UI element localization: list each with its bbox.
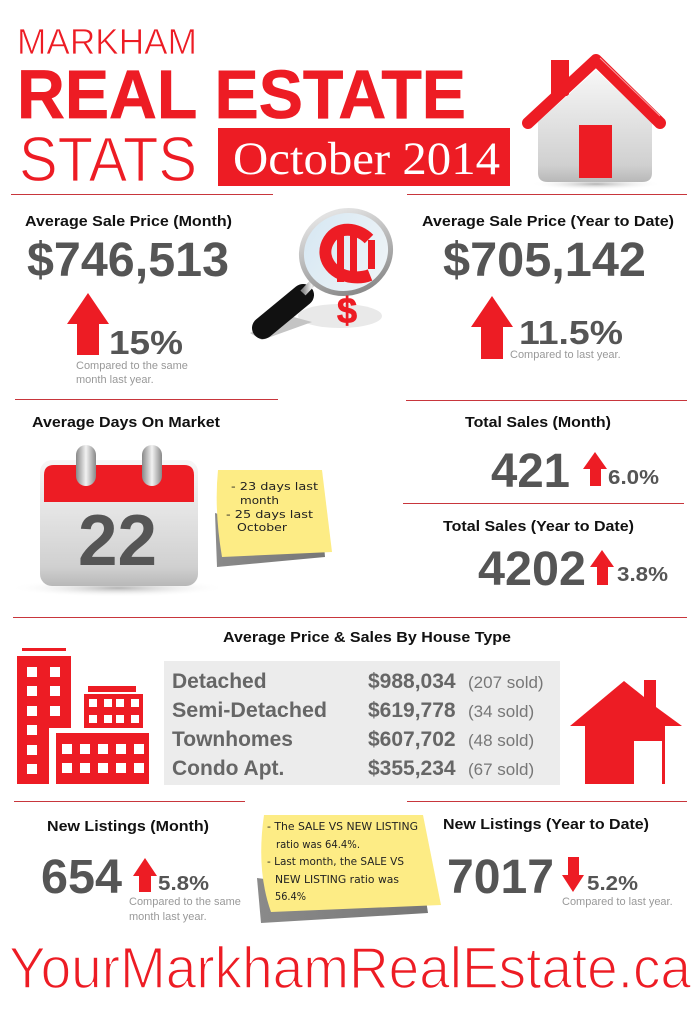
stat: new listings year to date: Compared to last year. xyxy=(562,896,673,908)
stat: average sale price month: $746,513 xyxy=(27,234,229,287)
row: detached xyxy=(172,670,544,693)
title: REAL ESTATE xyxy=(17,56,466,133)
stat: total sales month: 6.0% xyxy=(608,467,659,489)
stat: average sale price month: Compared to the same xyxy=(76,360,188,372)
sticky note: days on market: month xyxy=(240,494,279,507)
icon: apartment buildings xyxy=(17,648,149,784)
stat: total sales year to date: 3.8% xyxy=(617,564,668,586)
stat: average sale price month: month last year. xyxy=(76,374,154,386)
row: condo apt: $355,234 xyxy=(368,757,456,780)
icon: up arrow xyxy=(471,296,513,359)
title: MARKHAM xyxy=(17,21,197,62)
stat: average days on market: Average Days On Market xyxy=(32,415,220,431)
stat: new listings month xyxy=(41,819,241,923)
row: condo apt: (67 sold) xyxy=(468,760,534,779)
decorative rules xyxy=(11,194,687,802)
icon: down arrow xyxy=(562,857,584,892)
stat: total sales month: 421 xyxy=(491,445,570,498)
icon: magnifying glass with dollar sign xyxy=(250,198,402,340)
date banner: October 2014 xyxy=(233,133,500,185)
icon: calendar showing 22: 22 xyxy=(78,501,157,581)
title: STATS xyxy=(19,125,197,195)
stat: average sale price month: Average Sale Price (Month) xyxy=(25,214,232,230)
icon: red house xyxy=(570,680,682,784)
stat: new listings year to date: 5.2% xyxy=(587,873,638,895)
stat: average sale price month: 15% xyxy=(109,324,183,361)
sticky note: sale vs new listing ratio: NEW LISTING ratio was xyxy=(275,873,399,886)
panel: house type table xyxy=(164,661,560,785)
sticky note: days on market: - 25 days last xyxy=(226,508,314,521)
stat: total sales year to date: Total Sales (Year to Date) xyxy=(443,519,634,535)
icon: house with red roof xyxy=(528,58,662,190)
row: semi-detached xyxy=(172,699,534,722)
stat: new listings month: 5.8% xyxy=(158,873,209,895)
heading: average price and sales by house type: Average Price & Sales By House Type xyxy=(223,630,511,646)
stat: average sale price year to date: Compared to last year. xyxy=(510,349,621,361)
stat: average sale price year to date xyxy=(422,214,674,361)
sticky note: sale vs new listing ratio xyxy=(257,815,441,923)
row: detached: $988,034 xyxy=(368,670,456,693)
stat: total sales year to date xyxy=(443,519,668,596)
stat: new listings month: 654 xyxy=(41,851,122,904)
stat: new listings year to date: New Listings (Year to Date) xyxy=(443,817,649,833)
title xyxy=(17,21,466,195)
row: semi-detached: $619,778 xyxy=(368,699,456,722)
sticky note: days on market: October xyxy=(237,521,288,534)
sticky note: days on market xyxy=(215,470,332,567)
row: condo apt: Condo Apt. xyxy=(172,757,284,780)
icon: up arrow xyxy=(67,293,109,355)
row: townhomes: Townhomes xyxy=(172,728,293,751)
stat: new listings year to date xyxy=(443,817,673,908)
sticky note: sale vs new listing ratio: 56.4% xyxy=(275,890,306,903)
row: townhomes xyxy=(172,728,534,751)
row: detached: Detached xyxy=(172,670,267,693)
icon: magnifying glass with dollar sign: $ xyxy=(337,290,357,331)
row: semi-detached: (34 sold) xyxy=(468,702,534,721)
icon: calendar showing 22 xyxy=(10,445,226,597)
icon: up arrow xyxy=(133,858,157,892)
stat: total sales year to date: 4202 xyxy=(478,543,586,596)
sticky note: sale vs new listing ratio: - Last month, the SALE VS xyxy=(267,855,404,868)
stat: new listings month: New Listings (Month) xyxy=(47,819,209,835)
sticky note: sale vs new listing ratio: ratio was 64.4%. xyxy=(276,838,360,851)
stat: total sales month: Total Sales (Month) xyxy=(465,415,611,431)
icon: up arrow xyxy=(590,550,614,585)
stat: average sale price year to date: Average Sale Price (Year to Date) xyxy=(422,214,674,230)
stat: average sale price month xyxy=(25,214,232,386)
stat: new listings year to date: 7017 xyxy=(447,851,554,904)
row: semi-detached: Semi-Detached xyxy=(172,699,327,722)
sticky note: sale vs new listing ratio: - The SALE VS NEW LISTING xyxy=(267,820,418,833)
row: townhomes: (48 sold) xyxy=(468,731,534,750)
icon: up arrow xyxy=(583,452,607,486)
row: condo apt xyxy=(172,757,534,780)
stat: new listings month: month last year. xyxy=(129,911,207,923)
stat: average sale price year to date: $705,142 xyxy=(443,234,646,287)
sticky note: days on market: - 23 days last xyxy=(231,480,319,493)
stat: new listings month: Compared to the same xyxy=(129,896,241,908)
row: townhomes: $607,702 xyxy=(368,728,456,751)
row: detached: (207 sold) xyxy=(468,673,544,692)
stat: average sale price year to date: 11.5% xyxy=(519,314,623,351)
stat: total sales month xyxy=(465,415,659,498)
